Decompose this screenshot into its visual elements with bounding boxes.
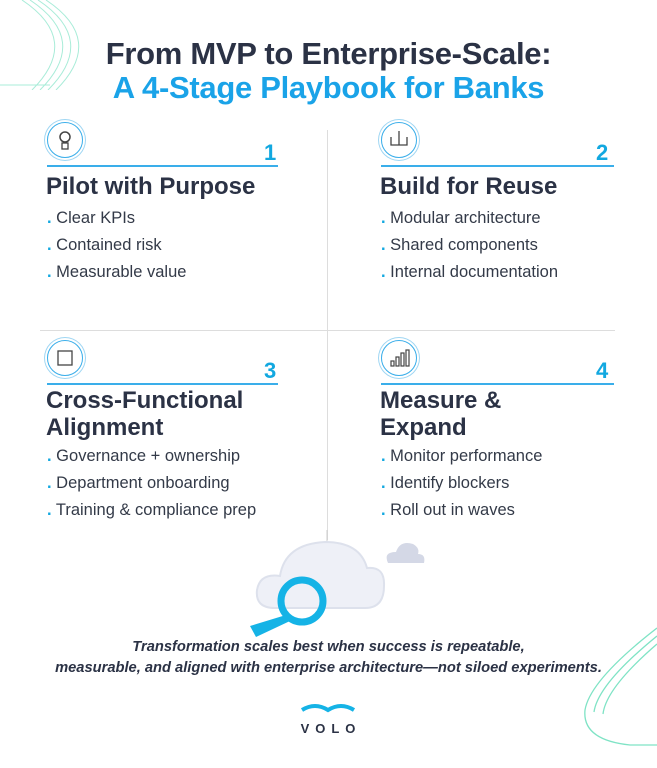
bullets: . Training & compliance prep	[47, 501, 256, 519]
bullets: . Measurable value	[47, 263, 186, 281]
panel: stage 4: 4	[596, 358, 608, 383]
bullets: . Shared components	[381, 236, 538, 254]
icon: lightbulb gear	[47, 122, 83, 158]
bullets: . Department onboarding	[47, 474, 230, 492]
quote text: Transformation scales best when success is repeatable,	[132, 639, 525, 655]
panel: stage 3: 3	[264, 358, 276, 383]
title: A 4-Stage Playbook for Banks	[113, 70, 544, 105]
dividers	[327, 130, 328, 540]
heading: Expand	[380, 414, 467, 441]
heading: Build for Reuse	[380, 173, 557, 200]
panel: stage 4	[378, 337, 614, 519]
logo: VOLO	[300, 704, 361, 736]
panel: stage 1	[44, 119, 278, 281]
bullets	[381, 447, 542, 519]
icon: network	[47, 340, 83, 376]
decorative corner lines bottom-right	[584, 628, 657, 746]
panel: stage 2	[378, 119, 614, 281]
bullets: . Governance + ownership	[47, 447, 240, 465]
bullets: . Monitor performance	[381, 447, 542, 465]
bullets: . Clear KPIs	[47, 209, 135, 227]
quote text: measurable, and aligned with enterprise architecture—not siloed experiments.	[55, 660, 602, 676]
title	[106, 36, 551, 105]
bullets: . Modular architecture	[381, 209, 541, 227]
icon: bar chart	[381, 340, 417, 376]
heading: Pilot with Purpose	[46, 173, 255, 200]
heading: Alignment	[46, 414, 163, 441]
heading	[380, 387, 501, 441]
panel: stage 1: 1	[264, 140, 276, 165]
logo: VOLO: VOLO	[301, 721, 361, 736]
bullets: . Internal documentation	[381, 263, 558, 281]
heading: Measure &	[380, 387, 501, 414]
bullets	[47, 447, 256, 519]
title: From MVP to Enterprise-Scale:	[106, 36, 551, 71]
decorative corner lines top-left	[0, 0, 80, 90]
bullets: . Identify blockers	[381, 474, 509, 492]
bullets: . Roll out in waves	[381, 501, 515, 519]
heading	[46, 387, 243, 441]
illustration: cloud with magnifier	[250, 530, 424, 637]
panel: stage 2: 2	[596, 140, 608, 165]
heading: Cross-Functional	[46, 387, 243, 414]
quote text	[55, 639, 602, 676]
bullets	[47, 209, 186, 281]
bullets	[381, 209, 558, 281]
bullets: . Contained risk	[47, 236, 162, 254]
panel: stage 3	[44, 337, 278, 519]
icon: plant growth	[381, 122, 417, 158]
